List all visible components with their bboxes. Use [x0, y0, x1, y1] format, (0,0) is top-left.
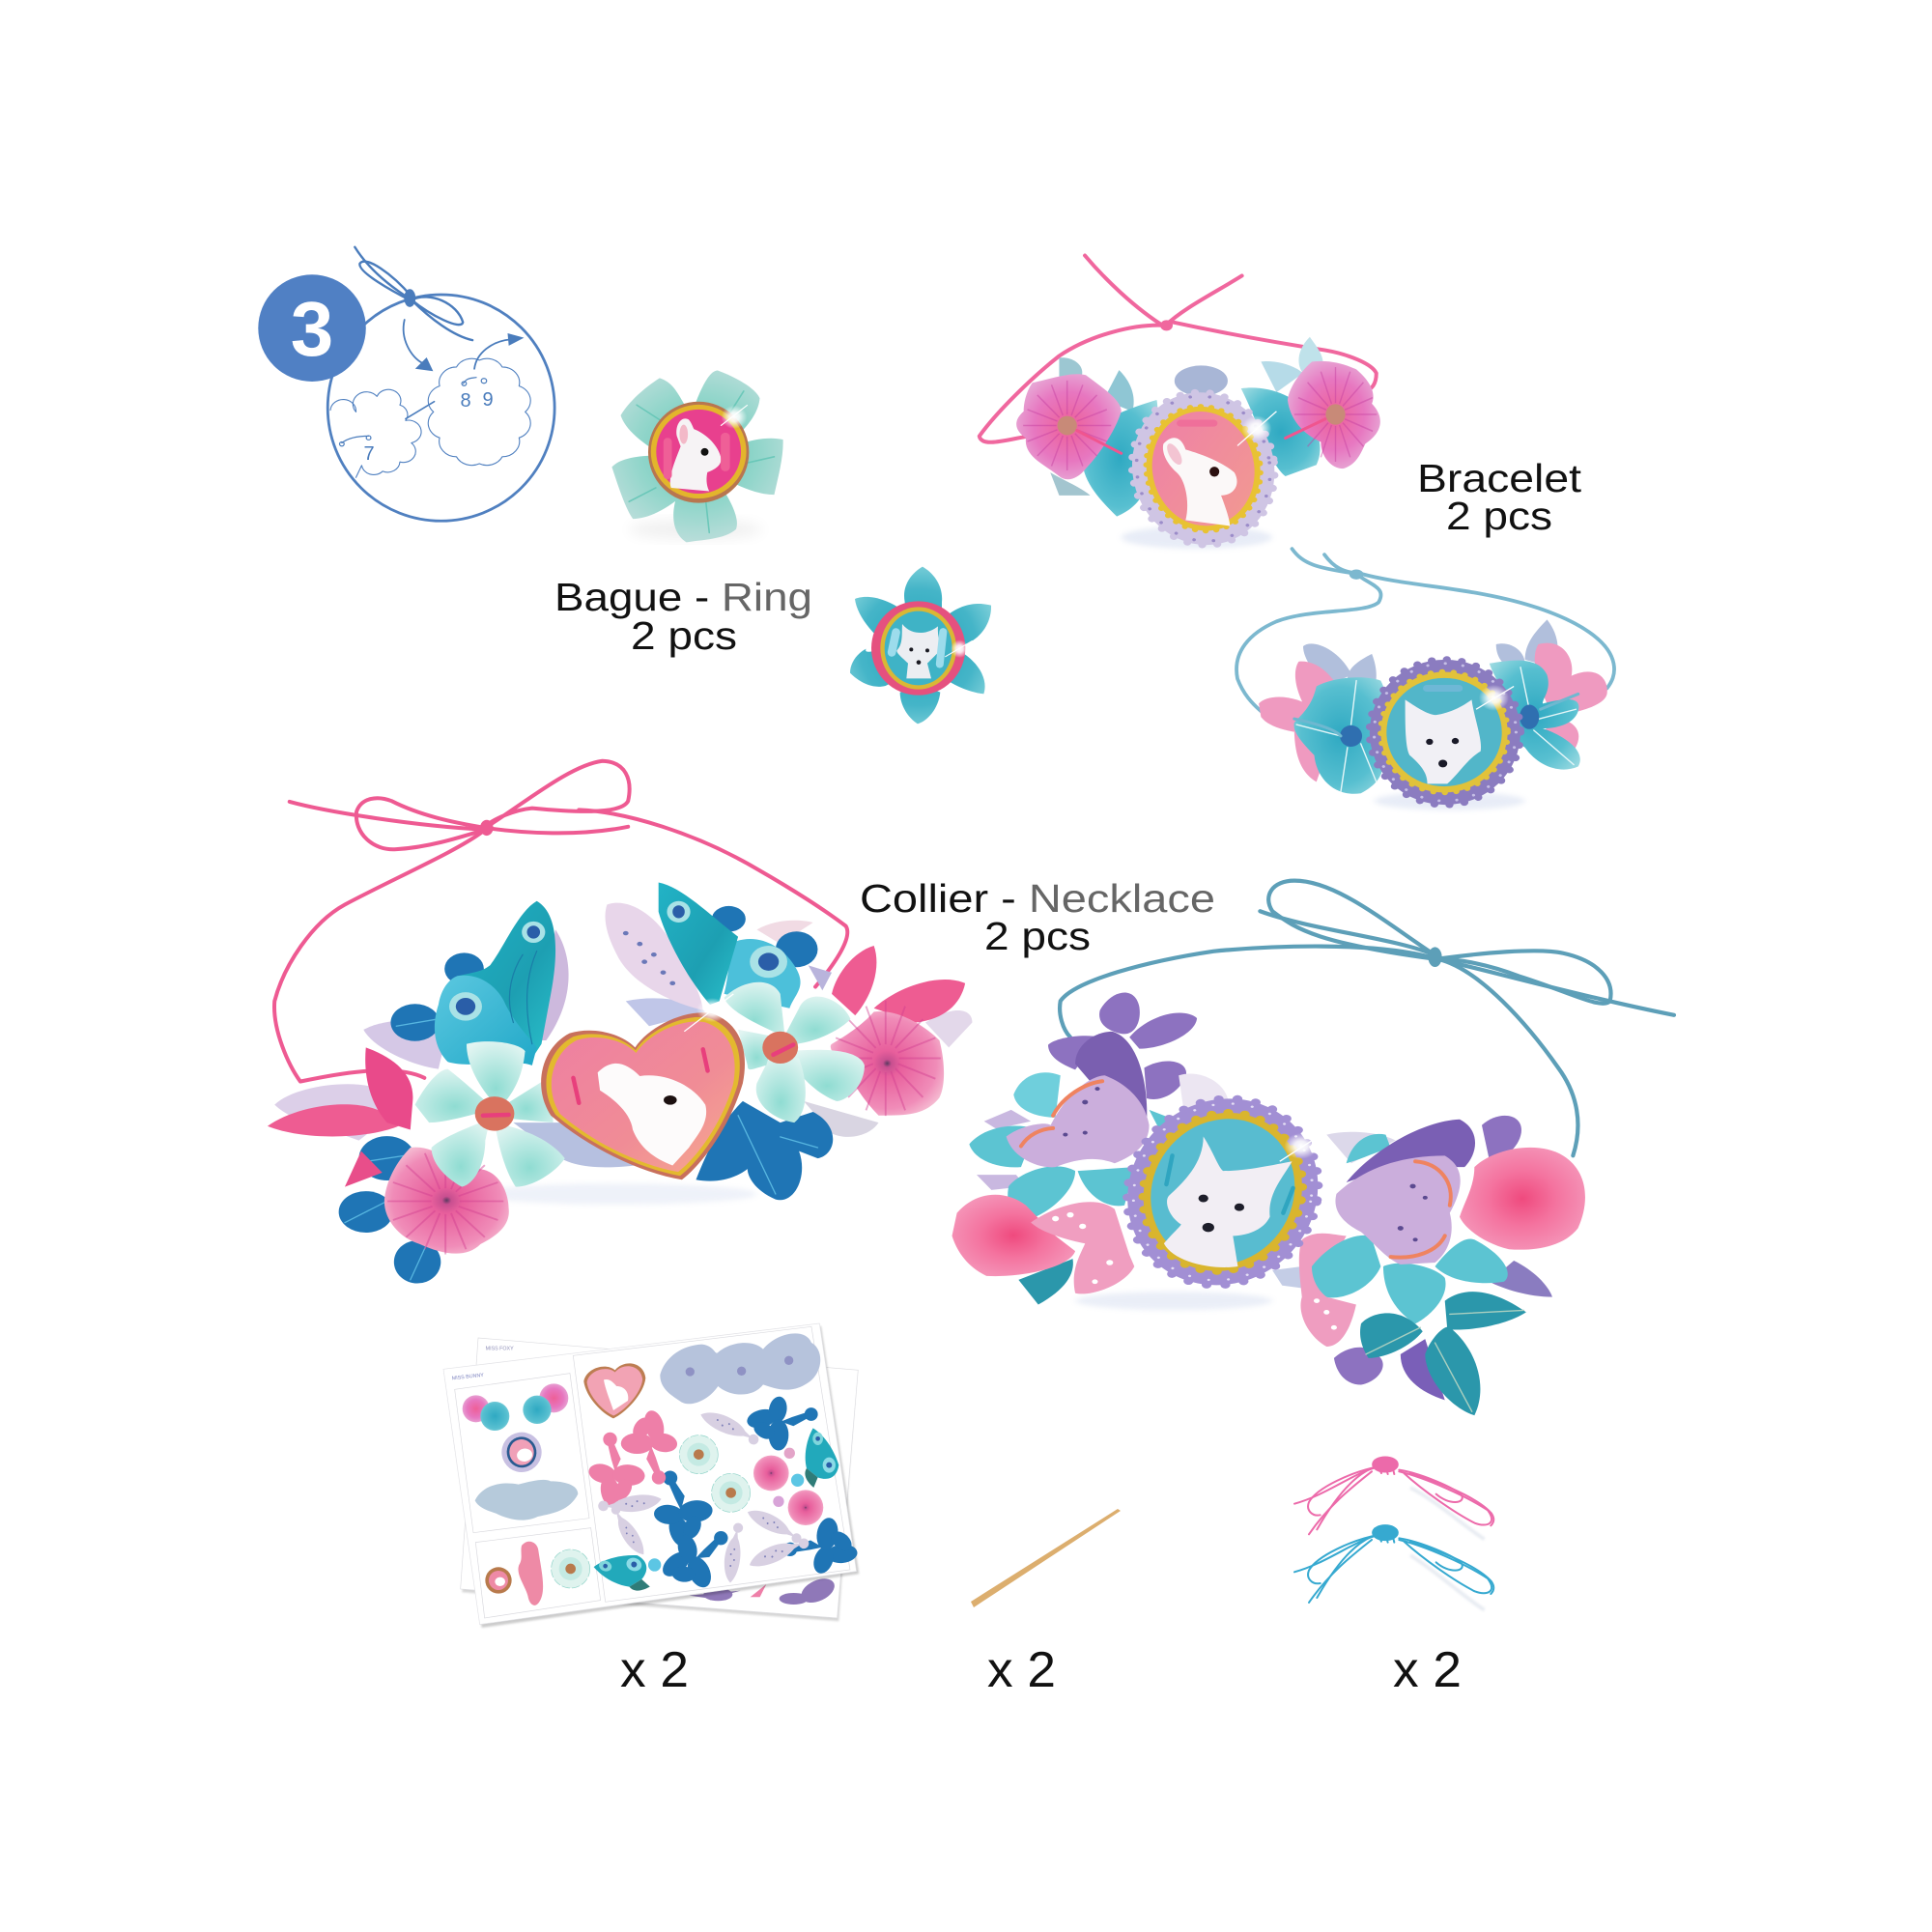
right pink flower	[831, 1011, 944, 1116]
blue flower left	[1082, 400, 1157, 517]
left mint flower	[415, 1041, 565, 1187]
blue fox necklace	[952, 881, 1674, 1415]
line two: 2 pcs	[1446, 494, 1552, 538]
lilac frame	[1123, 386, 1283, 551]
pale wing	[1335, 1155, 1461, 1264]
threading marks	[340, 378, 487, 446]
spots	[1398, 1184, 1428, 1241]
pink clover parts	[584, 1408, 679, 1512]
top lace	[1423, 685, 1463, 692]
number badge circle	[258, 274, 366, 382]
fox features	[1426, 738, 1459, 767]
pink rim	[871, 601, 965, 696]
right butterfly	[606, 883, 801, 1010]
heart rabbit	[604, 1379, 628, 1410]
curved arrow down	[404, 320, 433, 371]
spots	[623, 931, 675, 985]
rabbit	[670, 418, 721, 492]
elastic cord	[1236, 549, 1614, 711]
right flower veins	[831, 1001, 941, 1116]
lilac back shapes	[977, 1074, 1396, 1290]
rabbit ear inner	[1164, 441, 1185, 467]
hole numbers: 8	[460, 390, 471, 412]
orange bands	[1391, 1161, 1451, 1258]
bezel	[648, 402, 749, 503]
scalloped card left	[330, 389, 421, 477]
right flower veins	[1294, 367, 1377, 462]
portrait	[1139, 1112, 1307, 1272]
dark wing	[1075, 1032, 1147, 1125]
label: necklace	[860, 876, 1215, 958]
panel outlines	[455, 1326, 850, 1618]
paper sheets	[443, 1323, 865, 1628]
blue clover parts	[649, 1395, 865, 1602]
sparkle	[1476, 685, 1514, 711]
sparkle	[945, 639, 973, 658]
shadow	[1075, 1292, 1272, 1310]
pink dotted leaves right	[1299, 1234, 1356, 1347]
fore wing	[448, 901, 555, 1059]
pink flower right	[1288, 361, 1380, 469]
centre button	[475, 1096, 514, 1131]
fox medallion	[1112, 1089, 1333, 1294]
blue fox bracelet	[1236, 549, 1614, 810]
tied bow	[355, 247, 472, 340]
step number: 3	[291, 286, 333, 372]
blue portrait	[885, 611, 952, 685]
glitter ring	[1139, 402, 1267, 536]
glitter ring	[1380, 672, 1508, 792]
back leaves	[1303, 619, 1558, 690]
hind wing	[435, 976, 537, 1065]
back lilac shapes	[274, 921, 972, 1167]
left flower veins	[387, 1148, 503, 1255]
hind wing	[724, 939, 801, 1009]
heart inner	[587, 1366, 642, 1415]
laces	[483, 1044, 793, 1116]
pink flower left	[1016, 374, 1122, 479]
sparkle	[1237, 412, 1276, 445]
front sheet	[443, 1323, 857, 1625]
rabbit eye	[664, 1095, 677, 1105]
cord and bow	[274, 761, 847, 1082]
left panel leaf band	[475, 1480, 578, 1520]
sparkle	[721, 405, 748, 429]
flower centres	[1340, 705, 1539, 747]
ring artwork	[611, 371, 783, 542]
medallion with rabbit	[1123, 386, 1283, 551]
rabbit	[1163, 438, 1237, 526]
right butterfly	[1335, 1155, 1461, 1264]
left pink flower	[952, 1195, 1075, 1276]
laces	[887, 627, 948, 668]
shadow	[476, 1183, 756, 1205]
butterflies	[591, 1428, 838, 1595]
glitter ring	[1130, 1105, 1315, 1279]
pink dotted leaf left	[1031, 1202, 1134, 1293]
shadow	[1122, 526, 1272, 549]
ring shadow	[628, 520, 763, 539]
rabbit eye	[701, 448, 708, 456]
pink flowers	[753, 1448, 823, 1525]
mint flowers	[552, 1435, 751, 1588]
back sheet shadow	[462, 1341, 857, 1621]
heart piece	[583, 1363, 645, 1418]
blue flower right	[1490, 661, 1580, 770]
quantity sheets: x 2	[620, 1642, 689, 1698]
dark blue leaves	[339, 906, 833, 1284]
back wing	[532, 929, 569, 1040]
small rabbit piece	[485, 1567, 512, 1594]
mint petals	[611, 371, 783, 542]
line one: Bague - Ring	[554, 575, 812, 619]
back sheet purple parts	[689, 1574, 838, 1607]
laces	[1166, 1155, 1293, 1213]
purple frame	[1370, 660, 1520, 805]
eyespots	[449, 922, 545, 1021]
shadow	[1374, 792, 1525, 810]
flower base	[1294, 677, 1387, 794]
curved arrow out	[474, 333, 524, 369]
line one: Collier - Necklace	[860, 876, 1215, 921]
fox	[1406, 699, 1481, 783]
wing veins	[509, 952, 537, 1044]
pale wing	[1007, 1075, 1150, 1167]
blue petals	[850, 567, 991, 724]
diagram line art	[258, 247, 554, 521]
line two: 2 pcs	[984, 914, 1091, 958]
rabbit eye	[1209, 467, 1219, 476]
label: bracelet	[1417, 456, 1582, 538]
pink rabbit bracelet	[980, 256, 1380, 551]
blue flower right	[1241, 387, 1321, 476]
hole numbers: 9	[482, 389, 494, 411]
spotted wing	[606, 903, 703, 1010]
left panel flowers	[463, 1383, 568, 1431]
connecting cord	[406, 402, 435, 419]
pink strip	[518, 1542, 543, 1605]
fore wing	[659, 883, 738, 1005]
teal leaves	[969, 1072, 1508, 1323]
hole numbers	[363, 389, 494, 465]
quantity sticks: x 2	[987, 1642, 1056, 1698]
portrait	[1386, 678, 1502, 786]
scalloped card right	[428, 358, 530, 466]
pink petals	[1259, 643, 1607, 781]
cord shadow	[1410, 1488, 1485, 1610]
rabbit	[598, 1064, 706, 1165]
orange bands	[1021, 1081, 1102, 1146]
petal streaks	[629, 391, 774, 532]
fox	[1164, 1137, 1293, 1267]
sparkle	[1280, 1133, 1324, 1161]
glitter ring	[880, 607, 956, 690]
frame dots	[1128, 390, 1278, 547]
stick body	[971, 1509, 1121, 1607]
cloud centres	[686, 1356, 793, 1377]
side laces	[1294, 694, 1578, 736]
right dark wing	[1347, 1120, 1475, 1182]
ring with fox	[850, 567, 991, 724]
eyespots	[667, 901, 787, 978]
cord and bow	[1060, 881, 1674, 1155]
blue cord bundle	[1294, 1525, 1493, 1603]
flower centres	[1058, 404, 1346, 435]
dark teal veined leaves	[1018, 1259, 1526, 1415]
centre button	[762, 1032, 798, 1064]
pink cord bundle	[1294, 1458, 1493, 1534]
purple top leaves	[1048, 992, 1552, 1400]
cord laces	[664, 433, 730, 479]
back sheet	[461, 1338, 858, 1618]
flower petal lines	[1520, 668, 1576, 765]
side laces	[1077, 419, 1325, 453]
spots	[1063, 1087, 1100, 1137]
portrait	[1146, 407, 1261, 530]
medallion	[1123, 386, 1283, 551]
front sheet label: MISS BUNNY	[452, 1373, 485, 1381]
pink portrait	[656, 410, 741, 494]
lilac seed parts	[597, 1407, 810, 1583]
left flower veins	[1023, 381, 1111, 470]
fox	[896, 624, 941, 678]
sparkle	[684, 994, 733, 1032]
left butterfly	[435, 901, 569, 1065]
fox features	[1199, 1195, 1244, 1232]
ring with rabbit	[611, 371, 783, 542]
heart portrait	[552, 1021, 735, 1172]
heart frame	[541, 1012, 745, 1179]
wooden stick	[971, 1509, 1121, 1607]
label: ring	[554, 575, 812, 658]
frame dots	[1374, 664, 1516, 801]
back sheet label: MISS FOXY	[486, 1346, 514, 1351]
fox features	[909, 647, 929, 665]
left pink flower	[384, 1148, 509, 1254]
purple frame	[1112, 1089, 1333, 1294]
magnified circle outline	[327, 295, 554, 521]
elastic cords	[1294, 1458, 1493, 1610]
back leaves	[1050, 337, 1323, 496]
hole numbers: 7	[363, 443, 375, 465]
left butterfly	[1007, 1032, 1150, 1167]
line two: 2 pcs	[631, 613, 737, 658]
left panel medallion	[499, 1430, 544, 1475]
top lace	[1177, 420, 1217, 427]
flower base	[1490, 661, 1580, 770]
pink leaves	[268, 946, 965, 1187]
step 3 instruction diagram	[258, 247, 554, 521]
leaf veins	[1366, 1310, 1523, 1411]
glitter ring	[651, 405, 747, 498]
right rose flower	[1460, 1148, 1585, 1250]
elastic cord	[980, 256, 1377, 442]
pink butterfly necklace	[268, 761, 972, 1284]
quantity labels	[620, 1642, 1462, 1698]
frame dots	[1119, 1094, 1326, 1290]
flower petal lines	[1296, 681, 1377, 791]
line one: Bracelet	[1417, 456, 1582, 500]
right mint flower	[724, 982, 865, 1122]
blue flower left	[1294, 677, 1387, 794]
leaf veins	[345, 1019, 817, 1280]
flower cloud	[660, 1333, 820, 1404]
quantity cords: x 2	[1393, 1642, 1462, 1698]
rabbit ear	[679, 425, 688, 444]
heart glitter	[546, 1017, 740, 1176]
front sheet shadow	[445, 1326, 859, 1628]
